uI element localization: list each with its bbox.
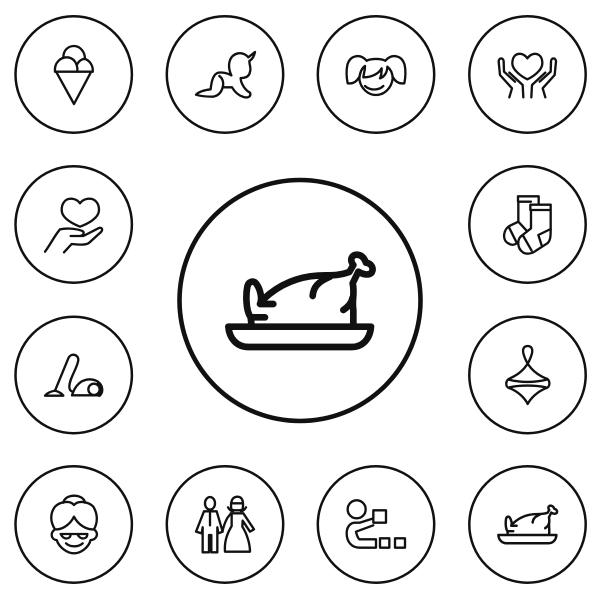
panel: crawling baby <box>167 16 283 133</box>
panel: spinning top <box>469 317 586 433</box>
icon: child with blocks <box>347 500 405 548</box>
panel: ice cream <box>15 16 132 133</box>
panel: vacuum cleaner <box>15 317 132 433</box>
icon: ice cream <box>55 46 93 104</box>
icon: hands holding heart <box>499 54 556 97</box>
panel: hands holding heart <box>469 16 586 133</box>
panel: girl <box>318 16 434 133</box>
icon: large roast turkey <box>228 255 373 347</box>
panel: heart in hand <box>15 166 132 283</box>
icon: socks <box>504 196 551 254</box>
icon: wedding couple <box>196 497 254 552</box>
icon: vacuum cleaner <box>45 355 102 396</box>
panel: child with blocks <box>318 466 434 583</box>
panel: wedding couple <box>167 466 283 583</box>
icon: girl face <box>347 56 405 95</box>
panel: grandmother <box>15 466 132 583</box>
icon: spinning top <box>506 346 549 404</box>
panel: socks <box>469 166 586 283</box>
icon: crawling baby <box>196 52 255 97</box>
panel: small roast turkey <box>469 466 586 583</box>
icon: grandmother face <box>51 496 97 553</box>
icon: heart in hand <box>45 199 102 252</box>
icon: small roast turkey <box>498 506 557 543</box>
panel: large roast turkey <box>180 180 420 421</box>
